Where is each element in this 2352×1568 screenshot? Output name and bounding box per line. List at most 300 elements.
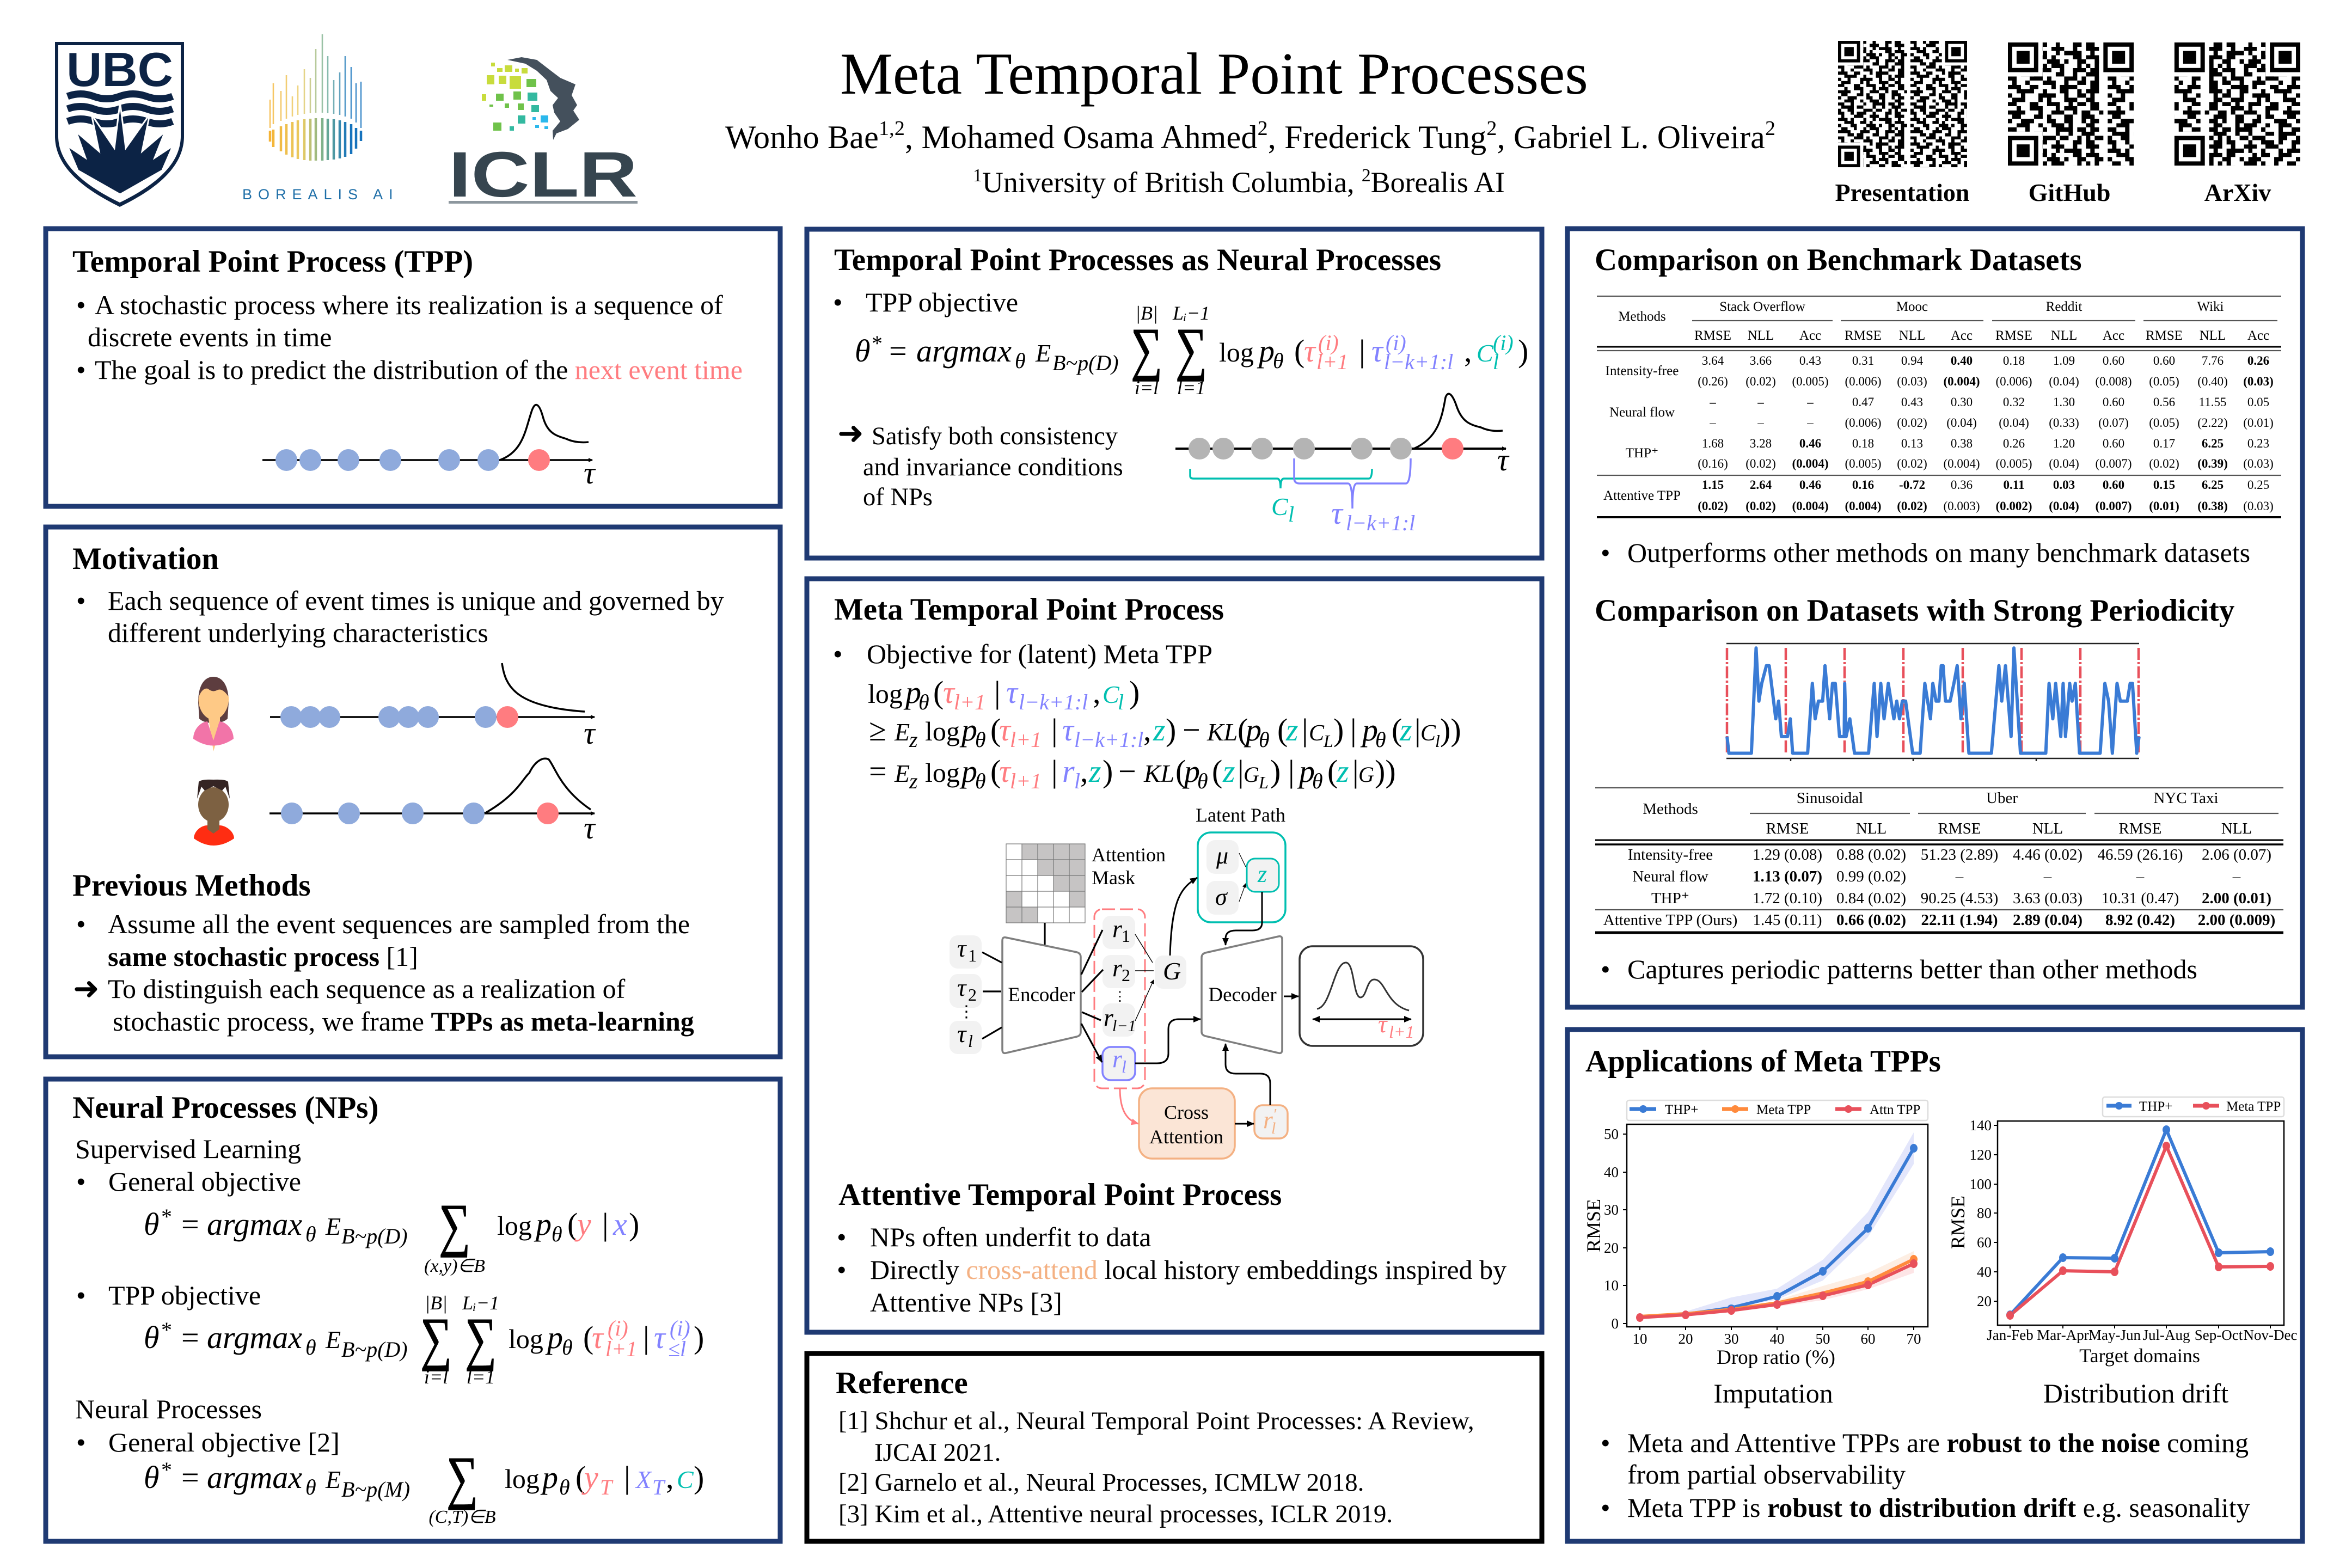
- diagram: model architecture: [950, 804, 1423, 1159]
- equation: TPP objective: i=l: [424, 1366, 448, 1388]
- table: benchmark datasets: –: [1709, 395, 1716, 409]
- output distribution: [1300, 946, 1423, 1046]
- chart: imputation: 40: [1604, 1164, 1619, 1180]
- chart: distribution drift: 120: [1970, 1147, 1992, 1163]
- equation: TPP objective: l+1: [605, 1337, 637, 1361]
- equation: latent form: G: [1358, 762, 1374, 787]
- table: periodic datasets: 51.23 (2.89): [1921, 846, 1998, 863]
- heading: Previous Methods: Previous Methods: [72, 868, 311, 903]
- equation: TPP objective: E: [325, 1326, 341, 1353]
- chart: distribution drift: 140: [1970, 1117, 1992, 1134]
- equation: log likelihood: (: [933, 675, 944, 710]
- equation: TPP objective: (i): [608, 1316, 628, 1340]
- equation: log likelihood: log: [868, 678, 903, 709]
- equation: latent form: KL: [1143, 759, 1174, 787]
- text: motivation: •: [76, 585, 86, 616]
- heading: Temporal Point Process (TPP): [72, 244, 473, 279]
- table: benchmark datasets: (0.40): [2197, 375, 2228, 388]
- text: reference list: [1] Shchur et al., Neural Temporal Point Processes: A Review,: [838, 1407, 1474, 1435]
- table: benchmark datasets: (0.007): [2095, 499, 2132, 513]
- table: benchmark datasets: 1.20: [2053, 437, 2075, 450]
- table: periodic datasets: 1.29 (0.08): [1753, 846, 1822, 863]
- equation: TPP objective: [144, 1292, 704, 1388]
- encoder: [1002, 938, 1081, 1053]
- equation: latent form: θ: [1312, 769, 1323, 793]
- table: periodic datasets: 1.13 (0.07): [1753, 868, 1822, 885]
- table: benchmark datasets: (0.006): [1845, 416, 1882, 430]
- table: benchmark datasets: (0.02): [1698, 499, 1728, 513]
- diagram: context and target windows: τ: [1331, 495, 1344, 531]
- heading: Reference: [836, 1366, 968, 1400]
- text: reference list: [2] Garnelo et al., Neural Processes, ICMLW 2018.: [838, 1468, 1364, 1497]
- input tau boxes: τ: [957, 1020, 967, 1048]
- chart: distribution drift: RMSE: [1947, 1196, 1969, 1249]
- table: benchmark datasets: NLL: [2200, 328, 2226, 343]
- equation: TPP objective with context: ∑: [1175, 316, 1207, 382]
- attention mask grid: Attention: [1092, 844, 1166, 866]
- table: periodic datasets: NYC Taxi: [2153, 789, 2219, 807]
- table: benchmark datasets: (0.02): [1745, 457, 1776, 470]
- table: benchmark datasets: 0.60: [2153, 354, 2175, 367]
- equation: TPP objective: θ: [562, 1335, 573, 1359]
- authors: 2: [1765, 117, 1775, 140]
- equation: TPP objective with context: ,: [1464, 333, 1472, 369]
- table: benchmark datasets: (0.04): [2049, 457, 2079, 470]
- table: benchmark datasets: 0.46: [1799, 437, 1821, 450]
- equation: TPP objective: θ: [144, 1320, 159, 1355]
- table: benchmark datasets: 0.23: [2247, 437, 2269, 450]
- table: benchmark datasets: (0.04): [2049, 375, 2079, 388]
- equation: NP objective: θ: [559, 1475, 570, 1499]
- table: benchmark datasets: Acc: [2247, 328, 2269, 343]
- r prime box: l: [1271, 1119, 1276, 1137]
- equation: lower bound: C: [1309, 721, 1325, 746]
- equation: lower bound: (: [990, 712, 1001, 748]
- panel: Meta Temporal Point Process: [807, 579, 1542, 1332]
- table: periodic datasets: THP⁺: [1651, 890, 1689, 907]
- authors: , Gabriel L. Oliveira: [1497, 119, 1765, 155]
- chart: distribution drift: 100: [1970, 1176, 1992, 1192]
- text: attentive TPP bullets: Directly: [870, 1254, 966, 1285]
- table: benchmark datasets: –: [1757, 395, 1764, 409]
- cross attention: [1139, 1088, 1235, 1159]
- text: consistency: and invariance conditions: [863, 454, 1123, 481]
- equation: general objective: (x,y)∈B: [424, 1256, 485, 1276]
- authors: 1,2: [879, 117, 905, 140]
- equation: latent form: E: [894, 759, 910, 787]
- table: periodic datasets: –: [2043, 868, 2052, 885]
- equation: TPP objective with context: p: [1257, 333, 1275, 369]
- logo: UBC shield: [55, 42, 184, 207]
- equation: NP objective: T: [600, 1475, 614, 1499]
- equation: lower bound: |: [1051, 712, 1058, 748]
- panel: Neural Processes: [46, 1079, 780, 1541]
- diagram: context and target windows: l−k+1:l: [1346, 511, 1415, 535]
- equation: NP objective: p: [540, 1460, 558, 1495]
- equation: TPP objective with context: (i): [1386, 330, 1406, 355]
- equation: NP objective: [144, 1445, 704, 1527]
- equation: general objective: |: [602, 1206, 609, 1242]
- equation: latent form: (: [1212, 754, 1222, 789]
- panel: TPPs as Neural Processes: [807, 229, 1542, 558]
- equation: log likelihood: l: [1118, 690, 1124, 714]
- equation: TPP objective with context: l=1: [1177, 377, 1205, 399]
- equation: latent form: θ: [1197, 769, 1208, 793]
- heading: Applications of Meta TPPs: [1585, 1044, 1941, 1079]
- input tau boxes: l: [968, 1031, 973, 1051]
- text: motivation: different underlying characteristics: [108, 617, 488, 648]
- equation: latent form: p: [1182, 754, 1200, 789]
- equation: lower bound: log: [925, 716, 960, 746]
- equation: general objective: x: [612, 1206, 627, 1242]
- table: benchmark datasets: 0.60: [2103, 478, 2124, 492]
- table: benchmark datasets: 0.60: [2103, 354, 2124, 367]
- encoder: Encoder: [1008, 984, 1075, 1006]
- equation: latent form: (: [990, 754, 1001, 789]
- table: benchmark datasets: 0.38: [1951, 437, 1973, 450]
- table: benchmark datasets: (2.22): [2197, 416, 2228, 430]
- equation: lower bound: −: [1183, 712, 1200, 748]
- table: benchmark datasets: 0.32: [2003, 395, 2025, 409]
- table: benchmark datasets: Attentive TPP: [1603, 488, 1681, 503]
- equation: NP objective: ,: [666, 1460, 674, 1495]
- table: benchmark datasets: (0.05): [2149, 375, 2179, 388]
- equation: lower bound: p: [959, 712, 977, 748]
- table: benchmark datasets: Intensity-free: [1606, 364, 1679, 378]
- text: benchmark finding: Outperforms other methods on many benchmark datasets: [1627, 537, 2250, 568]
- chart: distribution drift: Sep-Oct: [2195, 1327, 2243, 1343]
- aggregator G: [1155, 955, 1186, 989]
- table: benchmark datasets: RMSE: [1995, 328, 2032, 343]
- authors: 2: [1258, 117, 1268, 140]
- chart: imputation: Drop ratio (%): [1717, 1346, 1835, 1369]
- equation: TPP objective: |: [643, 1320, 650, 1355]
- table: periodic datasets: 2.06 (0.07): [2202, 846, 2271, 863]
- table: periodic datasets: 0.99 (0.02): [1836, 868, 1906, 885]
- table: benchmark datasets: RMSE: [1845, 328, 1882, 343]
- heading: benchmark: Comparison on Benchmark Datasets: [1595, 243, 2082, 277]
- representation boxes: [1094, 909, 1145, 1088]
- QR code: Presentation: Presentation: [1835, 179, 1970, 206]
- equation: lower bound: C: [1420, 721, 1436, 746]
- input tau boxes: 2: [968, 985, 977, 1004]
- table: benchmark datasets: Acc: [1951, 328, 1973, 343]
- equation: lower bound: z: [909, 727, 918, 752]
- equation: TPP objective: ∑: [420, 1306, 452, 1371]
- table: benchmark datasets: (0.007): [2095, 457, 2132, 470]
- equation: log likelihood: τ: [943, 675, 955, 710]
- affiliations: 2: [1362, 166, 1371, 186]
- equation: TPP objective with context: τ: [1304, 333, 1316, 369]
- table: benchmark datasets: Mooc: [1896, 299, 1928, 314]
- equation: latent form: =: [869, 754, 887, 789]
- table: periodic datasets: 90.25 (4.53): [1921, 890, 1998, 907]
- table: benchmark datasets: (0.38): [2197, 499, 2228, 513]
- logo: ICLR: [449, 57, 638, 211]
- legend: Meta TPP: [1756, 1102, 1811, 1117]
- table: benchmark datasets: (0.04): [1999, 416, 2029, 430]
- text: TPP definition: •: [76, 354, 86, 385]
- text: TPP definition: next event time: [575, 354, 743, 385]
- panel: Comparisons: [1567, 229, 2302, 1007]
- equation: log likelihood: ): [1129, 675, 1140, 710]
- table: benchmark datasets: Acc: [2103, 328, 2124, 343]
- table: benchmark datasets: 0.05: [2247, 395, 2269, 409]
- chart: imputation: RMSE: [1583, 1199, 1604, 1252]
- latent path: μ: [1216, 842, 1228, 869]
- equation: log likelihood: l+1: [954, 690, 985, 714]
- equation: TPP objective: *: [161, 1318, 172, 1342]
- equation: lower bound: ): [1166, 712, 1176, 748]
- representation boxes: 2: [1122, 965, 1130, 985]
- text: attentive TPP bullets: Attentive NPs [3]: [870, 1287, 1062, 1318]
- table: benchmark datasets: 3.64: [1702, 354, 1724, 367]
- equation: TPP objective with context: =: [889, 333, 907, 369]
- table: benchmark datasets: (0.02): [1897, 499, 1927, 513]
- equation: TPP objective with context: C: [1477, 339, 1494, 367]
- table: benchmark datasets: –: [1757, 416, 1764, 430]
- text: attentive TPP bullets: •: [837, 1254, 847, 1285]
- text: applications findings: Meta and Attentive TPPs are: [1627, 1428, 1946, 1458]
- equation: general objective: ): [629, 1206, 639, 1242]
- caption: Imputation: [1713, 1378, 1833, 1408]
- table: benchmark datasets: 0.03: [2053, 478, 2075, 492]
- equation: TPP objective with context: (: [1294, 333, 1304, 369]
- chart: imputation: 20: [1678, 1331, 1693, 1347]
- table: benchmark datasets: 0.17: [2153, 437, 2175, 450]
- table: benchmark datasets: –: [1806, 395, 1814, 409]
- table: periodic datasets: 2.00 (0.009): [2198, 911, 2275, 929]
- equation: TPP objective with context: (i): [1493, 330, 1514, 355]
- table: benchmark datasets: (0.005): [1792, 375, 1829, 388]
- table: benchmark datasets: 0.15: [2153, 478, 2175, 492]
- text: supervised learning labels: Supervised Learning: [75, 1134, 301, 1164]
- text: consistency: Satisfy both consistency: [872, 422, 1118, 450]
- equation: latent form: ): [1270, 754, 1281, 789]
- equation: log likelihood: |: [994, 675, 1001, 710]
- equation: NP objective: (: [575, 1460, 586, 1495]
- chart: imputation: 20: [1604, 1240, 1619, 1256]
- output distribution: τ: [1378, 1010, 1388, 1038]
- table: benchmark datasets: 0.60: [2103, 395, 2124, 409]
- table: benchmark datasets: 0.36: [1951, 478, 1973, 492]
- equation: latent form: ,: [1080, 754, 1088, 789]
- legend: Meta TPP: [2226, 1099, 2281, 1114]
- affiliations: Borealis AI: [1371, 166, 1505, 199]
- equation: TPP objective: l=1: [467, 1366, 495, 1388]
- diagram: sequence two: [270, 758, 596, 846]
- equation: general objective: argmax: [207, 1206, 302, 1242]
- diagram: context and target windows: τ: [1497, 442, 1510, 477]
- table: benchmark datasets: NLL: [1748, 328, 1774, 343]
- table: periodic datasets: –: [2232, 868, 2241, 885]
- table: benchmark datasets: 0.40: [1951, 354, 1973, 367]
- table: benchmark datasets: (0.02): [1745, 375, 1776, 388]
- decoder: [1202, 936, 1282, 1053]
- equation: TPP objective with context: l: [1493, 350, 1499, 374]
- table: periodic datasets: 1.45 (0.11): [1753, 911, 1822, 929]
- icon: woman avatar: [193, 677, 234, 751]
- text: TPP definition: The goal is to predict the distribution of the: [95, 354, 575, 385]
- table: benchmark datasets: (0.005): [1845, 457, 1882, 470]
- text: applications findings: Meta TPP is: [1627, 1492, 1767, 1523]
- table: benchmark datasets: (0.02): [1745, 499, 1776, 513]
- QR code: ArXiv: [2170, 38, 2305, 206]
- equation: TPP objective: argmax: [207, 1320, 302, 1355]
- table: benchmark datasets: (0.03): [2243, 499, 2274, 513]
- equation: TPP objective with context: θ: [1015, 348, 1026, 373]
- arrow: conclusion: ➜: [837, 414, 864, 451]
- equation: lower bound: |: [1302, 712, 1308, 748]
- representation boxes: r: [1112, 954, 1123, 982]
- text: applications findings: robust to the noise coming: [1946, 1428, 2249, 1458]
- latent path: σ: [1215, 884, 1228, 910]
- title: Meta Temporal Point Processes: [840, 41, 1588, 107]
- legend: [1627, 1100, 1928, 1120]
- table: benchmark datasets: (0.02): [1897, 457, 1927, 470]
- diagram: sequence one: [270, 663, 596, 751]
- text: neural process labels: Neural Processes: [75, 1394, 262, 1424]
- table: benchmark datasets: 0.43: [1799, 354, 1821, 367]
- representation boxes: ⋮: [1113, 990, 1126, 1004]
- equation: lower bound: θ: [975, 727, 986, 752]
- table: benchmark datasets: 6.25: [2202, 478, 2224, 492]
- equation: lower bound: θ: [1259, 727, 1270, 752]
- arrow: conclusion: ➜: [73, 970, 100, 1007]
- equation: TPP objective: log: [509, 1324, 543, 1354]
- panel: Temporal Point Process: [46, 229, 780, 506]
- equation: latent form: )): [1375, 754, 1396, 789]
- table: benchmark datasets: (0.03): [2243, 457, 2274, 470]
- text: previous methods: [1]: [379, 941, 418, 972]
- chart: distribution drift: 20: [1977, 1293, 1992, 1309]
- chart: imputation: 0: [1612, 1315, 1619, 1332]
- table: benchmark datasets: 0.60: [2103, 437, 2124, 450]
- chart: imputation: 10: [1632, 1331, 1647, 1347]
- equation: lower bound: (: [1392, 712, 1402, 748]
- table: benchmark datasets: Stack Overflow: [1719, 299, 1805, 314]
- table: benchmark datasets: Neural flow: [1609, 405, 1675, 420]
- table: benchmark datasets: 0.13: [1901, 437, 1923, 450]
- heading: Neural Processes (NPs): [72, 1091, 378, 1125]
- table: periodic datasets: Intensity-free: [1628, 846, 1713, 863]
- equation: latent form: (: [1175, 754, 1186, 789]
- text: applications findings: robust to distribution drift e.g. seasonality: [1767, 1492, 2250, 1523]
- text: neural process labels: •: [76, 1427, 86, 1457]
- equation: lower bound: τ: [1062, 712, 1075, 748]
- heading: Motivation: Motivation: [72, 542, 219, 576]
- table: benchmark datasets: (0.004): [1792, 499, 1829, 513]
- equation: TPP objective with context: θ: [1273, 348, 1284, 373]
- representation boxes: l−1: [1112, 1017, 1136, 1035]
- legend: Attn TPP: [1870, 1102, 1920, 1117]
- equation: latent form: l+1: [1010, 769, 1042, 793]
- table: benchmark datasets: (0.04): [1946, 416, 1977, 430]
- equation: log likelihood: C: [1102, 681, 1120, 708]
- equation: latent form: z: [1222, 754, 1235, 789]
- equation: TPP objective with context: argmax: [916, 333, 1012, 369]
- equation: lower bound: p: [1244, 712, 1261, 748]
- table: benchmark datasets: 7.76: [2202, 354, 2224, 367]
- r prime box: r: [1263, 1106, 1273, 1134]
- text: applications findings: •: [1601, 1492, 1610, 1523]
- output distribution: l+1: [1389, 1022, 1414, 1042]
- icon: man avatar: [194, 780, 234, 846]
- table: periodic datasets: 8.92 (0.42): [2105, 911, 2175, 929]
- representation boxes: 1: [1122, 926, 1130, 946]
- chart: distribution drift: Mar-Apr: [2037, 1327, 2089, 1343]
- equation: general objective: [144, 1192, 639, 1276]
- equation: lower bound: ,: [1143, 712, 1151, 748]
- equation: NP objective: E: [325, 1466, 341, 1493]
- table: benchmark datasets: 2.64: [1750, 478, 1772, 492]
- cross attention: Attention: [1149, 1126, 1223, 1148]
- equation: latent form: z: [909, 769, 918, 793]
- latent path: [1196, 804, 1285, 922]
- panel: Reference: [807, 1353, 1542, 1541]
- table: benchmark datasets: 0.18: [2003, 354, 2025, 367]
- table: periodic datasets: Uber: [1986, 789, 2018, 807]
- input tau boxes: τ: [957, 973, 967, 1001]
- equation: log likelihood: θ: [918, 690, 929, 714]
- text: TPP definition: discrete events in time: [88, 322, 332, 352]
- equation: NP objective: θ: [305, 1475, 316, 1499]
- table: benchmark datasets: 0.11: [2004, 478, 2024, 492]
- equation: lower bound: |: [1350, 712, 1357, 748]
- table: benchmark datasets: NLL: [2051, 328, 2077, 343]
- equation: latent form: l: [1074, 769, 1080, 793]
- table: benchmark datasets: (0.004): [1845, 499, 1882, 513]
- equation: NP objective: ∑: [446, 1445, 478, 1510]
- table: benchmark datasets: 0.94: [1901, 354, 1924, 367]
- equation: lower bound: ≥: [869, 712, 886, 748]
- table: periodic datasets: RMSE: [2119, 820, 2161, 837]
- equation: NP objective: B~p(M): [341, 1477, 410, 1502]
- table: benchmark datasets: Acc: [1799, 328, 1821, 343]
- table: benchmark datasets: NLL: [1899, 328, 1925, 343]
- equation: NP objective: argmax: [207, 1460, 302, 1495]
- representation boxes: r: [1112, 1045, 1123, 1073]
- table: benchmark datasets: (0.26): [1698, 375, 1728, 388]
- legend: THP+: [2139, 1099, 2172, 1114]
- equation: TPP objective: ∑: [465, 1306, 497, 1371]
- text: supervised learning labels: General objective: [108, 1166, 301, 1197]
- table: benchmark datasets: 0.56: [2153, 395, 2175, 409]
- table: benchmark datasets: Wiki: [2197, 299, 2224, 314]
- text: supervised learning labels: TPP objective: [108, 1280, 261, 1310]
- equation: log likelihood: l−k+1:l: [1019, 690, 1088, 714]
- table: benchmark datasets: 3.66: [1750, 354, 1772, 367]
- equation: NP objective: |: [624, 1460, 630, 1495]
- text: previous methods: TPPs as meta-learning: [431, 1006, 694, 1037]
- input tau boxes: ⋮: [958, 1003, 975, 1021]
- table: periodic datasets: RMSE: [1766, 820, 1809, 837]
- logo: UBC shield: UBC: [66, 42, 173, 96]
- equation: general objective: =: [181, 1206, 199, 1242]
- representation boxes: r: [1104, 1003, 1114, 1031]
- QR code: ArXiv: ArXiv: [2204, 179, 2271, 206]
- diagram: context and target windows: l: [1288, 502, 1294, 526]
- equation: TPP objective: |B|: [425, 1292, 448, 1314]
- text: attentive TPP bullets: cross-attend local history embeddings inspired by: [966, 1254, 1506, 1285]
- latent path: Latent Path: [1196, 804, 1285, 826]
- equation: general objective: θ: [552, 1222, 562, 1246]
- equation: lower bound: L: [1323, 731, 1333, 751]
- table: benchmark datasets: Methods: [1618, 309, 1666, 324]
- equation: general objective: θ: [144, 1206, 159, 1242]
- chart: distribution drift: May-Jun: [2088, 1327, 2141, 1343]
- heading: Attentive TPP: Attentive Temporal Point Process: [838, 1178, 1282, 1212]
